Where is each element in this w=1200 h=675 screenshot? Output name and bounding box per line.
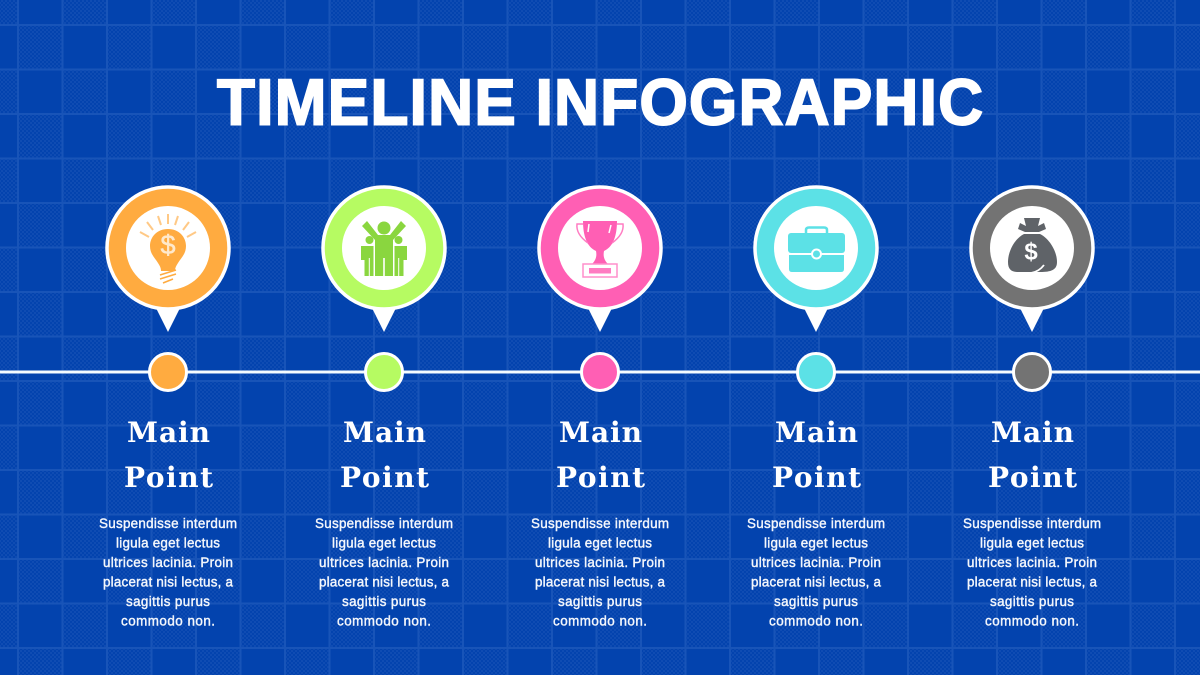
icon: money bag: $ — [1024, 238, 1038, 266]
description: sagittis purus — [774, 594, 858, 609]
heading: Point — [556, 461, 645, 494]
heading: Main — [775, 416, 858, 449]
description: Suspendisse interdum — [315, 516, 453, 531]
description: ligula eget lectus — [548, 536, 652, 550]
marker dot — [366, 354, 402, 390]
icon: money bag — [1008, 218, 1057, 273]
step 2: green — [315, 187, 453, 628]
description: commodo non. — [337, 614, 431, 628]
heading: Main — [343, 416, 426, 449]
description: ultrices lacinia. Proin — [319, 555, 449, 570]
icon: group of people — [361, 221, 407, 276]
heading: Point — [988, 461, 1077, 494]
pin: pink trophy — [539, 187, 661, 332]
description: ligula eget lectus — [764, 536, 868, 550]
marker dot — [1014, 354, 1050, 390]
description: sagittis purus — [342, 594, 426, 609]
step 1: orange — [99, 187, 237, 628]
pin: grey money bag — [971, 187, 1093, 332]
description: ultrices lacinia. Proin — [751, 555, 881, 570]
description: ligula eget lectus — [332, 536, 436, 550]
marker dot — [582, 354, 618, 390]
marker dot — [150, 354, 186, 390]
heading: Point — [340, 461, 429, 494]
pin: orange light bulb — [107, 187, 229, 332]
description: Suspendisse interdum — [963, 516, 1101, 531]
heading: Main — [559, 416, 642, 449]
description: Suspendisse interdum — [747, 516, 885, 531]
heading: Point — [124, 461, 213, 494]
pin: green people — [323, 187, 445, 332]
description: ultrices lacinia. Proin — [535, 555, 665, 570]
icon: briefcase — [788, 228, 845, 272]
marker dot — [798, 354, 834, 390]
description: ligula eget lectus — [980, 536, 1084, 550]
description: commodo non. — [985, 614, 1079, 628]
description: placerat nisi lectus, a — [319, 574, 450, 590]
description: Suspendisse interdum — [99, 516, 237, 531]
description: ligula eget lectus — [116, 536, 220, 550]
description: sagittis purus — [558, 594, 642, 609]
description: placerat nisi lectus, a — [751, 574, 882, 590]
title: TIMELINE INFOGRAPHIC — [217, 66, 983, 139]
icon: trophy — [577, 221, 623, 277]
icon: light bulb with dollar — [140, 214, 196, 283]
heading: Main — [127, 416, 210, 449]
description: ultrices lacinia. Proin — [103, 555, 233, 570]
description: sagittis purus — [990, 594, 1074, 609]
description: commodo non. — [121, 614, 215, 628]
heading: Point — [772, 461, 861, 494]
step 5: grey — [963, 187, 1101, 628]
description: placerat nisi lectus, a — [103, 574, 234, 590]
pin: cyan briefcase — [755, 187, 877, 332]
description: commodo non. — [769, 614, 863, 628]
step 4: cyan — [747, 187, 885, 628]
description: placerat nisi lectus, a — [535, 574, 666, 590]
timeline line — [0, 370, 1200, 374]
description: Suspendisse interdum — [531, 516, 669, 531]
description: commodo non. — [553, 614, 647, 628]
description: placerat nisi lectus, a — [967, 574, 1098, 590]
icon: light bulb with dollar: $ — [160, 230, 176, 260]
description: sagittis purus — [126, 594, 210, 609]
description: ultrices lacinia. Proin — [967, 555, 1097, 570]
heading: Main — [991, 416, 1074, 449]
step 3: pink — [531, 187, 669, 628]
